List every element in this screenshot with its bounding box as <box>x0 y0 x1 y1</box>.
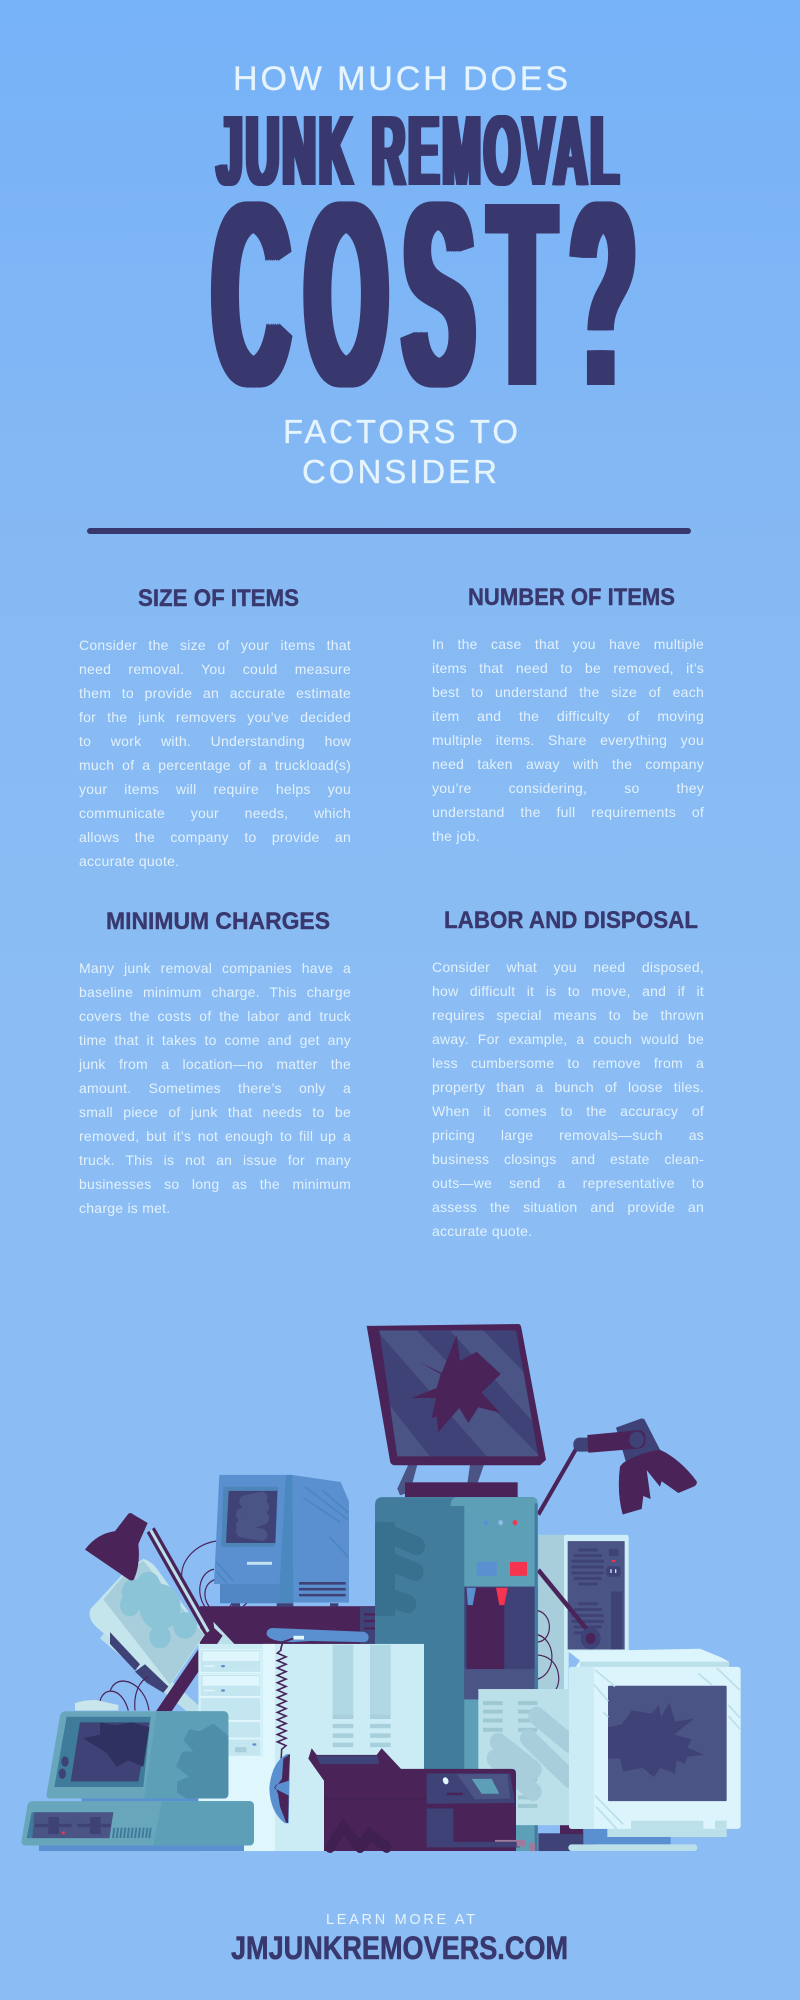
old computer with keyboard base <box>21 1711 254 1851</box>
text: number of items: item and the difficulty of moving <box>432 708 704 724</box>
text: size of items: communicate your needs, which <box>79 805 351 821</box>
cables lower <box>100 1676 149 1711</box>
footer: learn more at: LEARN MORE AT <box>326 1912 475 1928</box>
text: number of items: items that need to be removed, it’s <box>432 660 704 676</box>
text: labor and disposal: away. For example, a couch would be <box>432 1031 704 1047</box>
subtitle: factors to consider <box>283 413 518 490</box>
text: number of items: In the case that you have multiple <box>432 636 704 652</box>
title: how much does: HOW MUCH DOES <box>233 60 568 98</box>
crt monitor <box>568 1649 741 1851</box>
text: size of items: to work with. Understanding how <box>79 733 351 749</box>
text: size of items: allows the company to provide an <box>79 829 351 845</box>
broken scanner <box>90 1559 235 1711</box>
monitor stands <box>397 1465 484 1495</box>
text: minimum charges: covers the costs of the labor and truck <box>79 1008 351 1024</box>
subtitle: factors to consider: FACTORS TO <box>283 413 518 450</box>
text: size of items: your items will require helps you <box>79 781 351 797</box>
text: labor and disposal: Consider what you need disposed, <box>432 959 704 975</box>
text: number of items <box>432 636 704 844</box>
text: minimum charges <box>78 960 351 1216</box>
icon: desk lamp right <box>538 1418 697 1514</box>
cables <box>182 1541 248 1607</box>
old blue computer <box>214 1475 349 1607</box>
text: minimum charges: Many junk removal companies have a <box>79 960 351 976</box>
illustration: pile of broken electronics <box>22 1324 741 1853</box>
back layer <box>367 1324 697 1851</box>
desk <box>200 1606 375 1647</box>
sheet of paper <box>478 1689 570 1825</box>
icon: desk lamp left <box>85 1513 223 1711</box>
text: number of items: multiple items. Share everything you <box>432 732 704 748</box>
text: labor and disposal: less cumbersome to remove from a <box>432 1055 704 1071</box>
bottom rubble <box>538 1825 671 1851</box>
divider rule <box>87 528 691 534</box>
purple printer <box>308 1748 535 1851</box>
text: labor and disposal: accurate quote. <box>432 1223 532 1239</box>
text: labor and disposal: property than a bunch of loose tiles. <box>432 1079 704 1095</box>
text: labor and disposal: When it comes to the accuracy of <box>432 1103 704 1119</box>
broken monitor <box>367 1324 546 1465</box>
text: minimum charges: removed, but it’s not enough to fill up a <box>79 1128 351 1144</box>
text: minimum charges: charge is met. <box>79 1200 170 1216</box>
white computer tower <box>198 1644 424 1851</box>
water cooler tower <box>375 1497 538 1851</box>
text: labor and disposal: business closings and estate clean- <box>432 1151 704 1167</box>
text: number of items: need taken away with the company <box>432 756 704 772</box>
text: minimum charges: small piece of junk that needs to be <box>79 1104 351 1120</box>
footer: website: JMJUNKREMOVERS.COM <box>231 1930 568 1966</box>
text: minimum charges: time that it takes to come and get any <box>79 1032 351 1048</box>
text: size of items: need removal. You could measure <box>79 661 351 677</box>
text: labor and disposal: assess the situation and provide an <box>432 1199 704 1215</box>
text: minimum charges: amount. Sometimes there’s only a <box>79 1080 351 1096</box>
text: size of items: Consider the size of your items that <box>79 637 351 653</box>
icon: telephone <box>267 1628 369 1823</box>
text: labor and disposal: outs—we send a representative to <box>432 1175 704 1191</box>
heading: minimum charges: MINIMUM CHARGES <box>106 908 330 935</box>
text: labor and disposal: requires special means to be thrown <box>432 1007 704 1023</box>
text: number of items: the job. <box>432 828 480 844</box>
title: cost?: COST? <box>213 147 651 441</box>
text: size of items: much of a percentage of a truckload(s) <box>79 757 351 773</box>
text: number of items: understand the full requirements of <box>432 804 704 820</box>
text: size of items: accurate quote. <box>79 853 179 869</box>
text: labor and disposal: pricing large removals—such as <box>432 1127 704 1143</box>
text: number of items: you’re considering, so they <box>432 780 704 796</box>
text: minimum charges: truck. This is not an issue for many <box>79 1152 351 1168</box>
text: labor and disposal: how difficult it is to move, and if it <box>432 983 704 999</box>
subtitle: factors to consider: CONSIDER <box>302 453 497 490</box>
mouse <box>75 1700 118 1711</box>
text: labor and disposal <box>432 959 704 1239</box>
text: minimum charges: businesses so long as the minimum <box>79 1176 351 1192</box>
title: junk removal: JUNK REMOVAL <box>217 95 622 207</box>
text: minimum charges: junk from a location—no matter the <box>79 1056 351 1072</box>
text: size of items <box>79 637 351 869</box>
text: minimum charges: baseline minimum charge. This charge <box>79 984 351 1000</box>
text: size of items: them to provide an accurate estimate <box>79 685 351 701</box>
text: size of items: for the junk removers you’ve decided <box>79 709 351 725</box>
back computer tower <box>538 1535 629 1690</box>
heading: size of items: SIZE OF ITEMS <box>138 585 299 612</box>
text: number of items: best to understand the size of each <box>432 684 704 700</box>
